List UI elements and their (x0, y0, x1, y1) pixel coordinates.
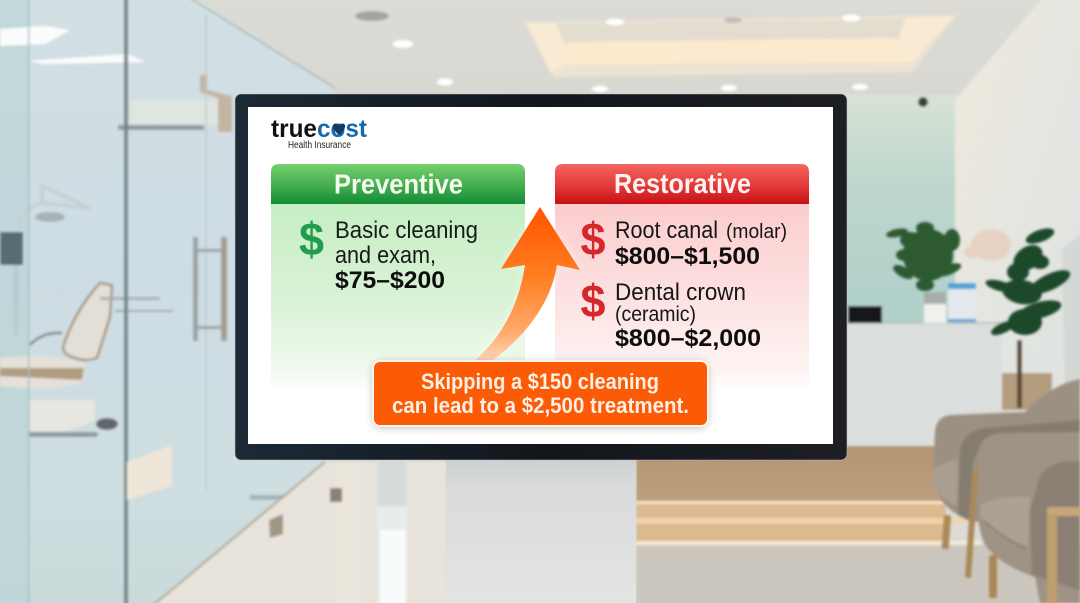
glass wall with dental chair (0, 0, 335, 603)
preventive text: and exam, (335, 242, 436, 269)
root canal text: $800–$1,500 (615, 243, 760, 270)
panel: preventive: Preventive (334, 168, 463, 200)
icon: heart in logo (333, 124, 345, 135)
arrow: preventive to restorative (474, 207, 580, 364)
icon: red dollar root canal: $ (580, 213, 606, 265)
panel: restorative: Restorative (614, 168, 751, 199)
ceiling (190, 0, 1045, 100)
logo: truecost Health Insurance: Health Insurance (288, 140, 351, 151)
root canal text: (molar) (726, 221, 787, 243)
wood band and light strips (636, 445, 956, 501)
plants and flowers (885, 222, 1073, 338)
preventive text: $75–$200 (335, 267, 445, 294)
dental crown text: $800–$2,000 (615, 325, 761, 352)
icon: green dollar: $ (299, 213, 324, 265)
right floor (636, 545, 1080, 603)
monitor (235, 94, 847, 460)
callout (372, 360, 709, 428)
ceiling spot lights (136, 14, 868, 92)
recessed ceiling light (524, 15, 957, 77)
planter (1002, 373, 1052, 410)
floor and pillar reflections (150, 462, 446, 603)
chairs (933, 379, 1080, 603)
dental lamp arm (18, 186, 90, 225)
preventive header (271, 164, 525, 204)
glass frame and door (124, 0, 128, 603)
root canal text: Root canal (615, 217, 718, 244)
monitor bezel (235, 94, 847, 460)
restorative header (555, 164, 809, 204)
callout: can lead to a $2,500 treatment. (392, 393, 689, 418)
back wall and right wall (845, 95, 960, 330)
panel: preventive (271, 164, 525, 395)
preventive text (335, 217, 478, 294)
icon: red dollar crown: $ (580, 275, 606, 327)
logo: truecost Health Insurance: truecost (271, 115, 368, 143)
reception desk (846, 323, 1001, 446)
dental crown text: Dental crown (615, 279, 746, 306)
monitor screen (248, 107, 833, 444)
callout: Skipping a $150 cleaning (421, 369, 659, 394)
dental crown text: (ceramic) (615, 303, 696, 326)
root canal text (615, 217, 787, 270)
dental chair (30, 290, 75, 300)
door handle (193, 237, 227, 341)
preventive text: Basic cleaning (335, 217, 478, 244)
pedestal (446, 458, 636, 603)
dental crown text (615, 279, 761, 352)
panel: restorative (555, 164, 809, 395)
